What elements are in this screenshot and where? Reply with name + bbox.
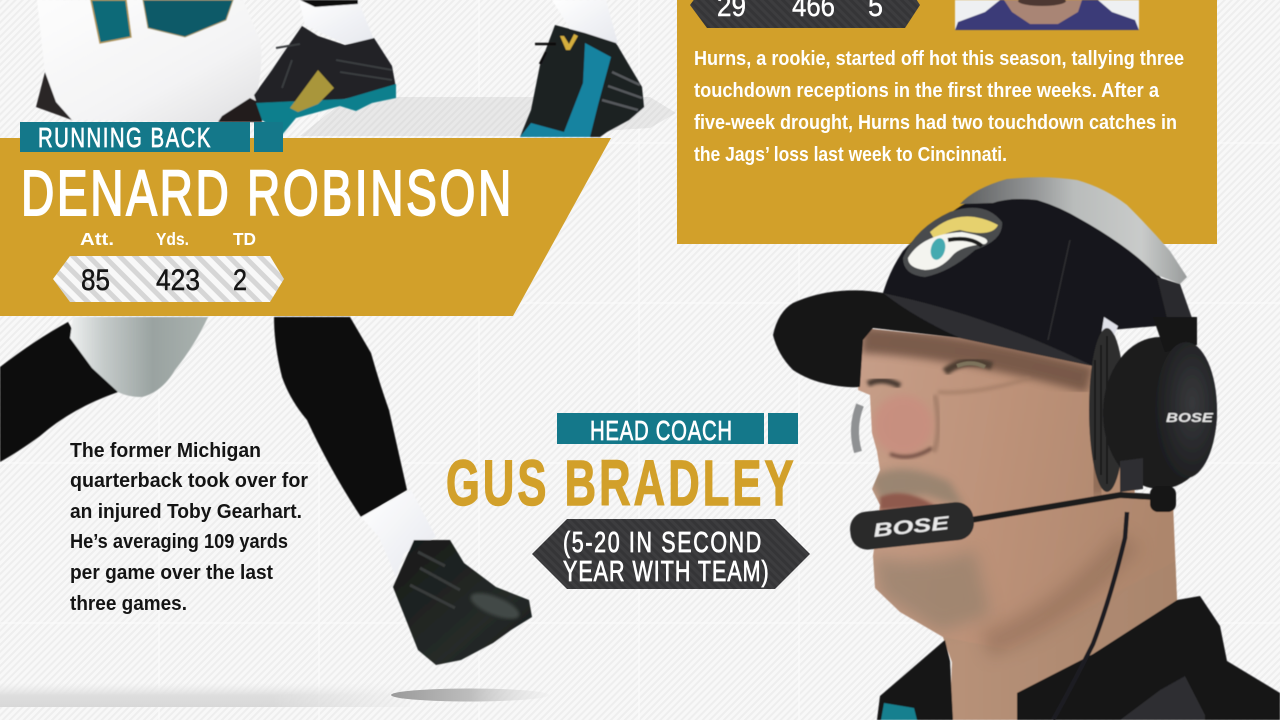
- record badge: (5-20 IN SECOND: [563, 527, 761, 559]
- right cleat and sock: [520, 0, 644, 137]
- headset cable: [1053, 512, 1127, 720]
- photo: Robinson lower body: [0, 317, 532, 665]
- eyes: [868, 380, 900, 386]
- cap: [773, 192, 1170, 387]
- player name: DENARD ROBINSON: [21, 158, 511, 229]
- body text: five-week drought, Hurns had two touchdown catches in: [694, 111, 1177, 134]
- shorts: [70, 317, 208, 397]
- collar and jacket: [877, 596, 1280, 720]
- stat labels: [80, 229, 256, 249]
- boom microphone: BOSE: [872, 513, 952, 542]
- headset ear cup: [1089, 317, 1217, 492]
- stat labels: Yds.: [156, 229, 189, 249]
- face and neck: [857, 328, 1178, 720]
- text block: Robinson description: The former Michigan: [70, 439, 261, 462]
- body text: [694, 47, 1184, 166]
- text block: Robinson description: quarterback took over for: [70, 469, 308, 492]
- panel: Hurns gold box: [677, 0, 1217, 244]
- text block: Robinson description: an injured Toby Gearhart.: [70, 500, 302, 523]
- text block: Robinson description: [70, 439, 308, 615]
- stat values pill: [690, 0, 920, 28]
- stat values: 85: [81, 264, 110, 297]
- stat values: 423: [156, 264, 200, 297]
- role tag: [557, 413, 798, 447]
- headshot: [955, 0, 1139, 30]
- headset strap: [1157, 277, 1192, 322]
- trailing leg: [0, 322, 118, 462]
- stat values: 2: [233, 264, 247, 297]
- role tag: HEAD COACH: [590, 416, 732, 447]
- jersey: [36, 0, 262, 122]
- record badge: [532, 519, 810, 589]
- panel: Robinson gold banner: [0, 122, 611, 316]
- left cleat and sock: [254, 0, 396, 135]
- boom microphone: [848, 486, 1176, 551]
- neck: [944, 566, 1178, 686]
- photo: coach Gus Bradley: [773, 177, 1280, 720]
- text block: Robinson description: three games.: [70, 592, 187, 615]
- position tag: RUNNING BACK: [38, 123, 210, 154]
- text block: Robinson description: per game over the last: [70, 561, 273, 584]
- stubble and mouth: [870, 469, 965, 508]
- headband: [960, 177, 1187, 284]
- panel: head coach title block: [446, 413, 810, 589]
- record badge: YEAR WITH TEAM): [563, 556, 769, 588]
- far earpiece: [855, 405, 860, 452]
- leading leg: [274, 317, 407, 517]
- stat labels: Att.: [80, 229, 114, 249]
- cap shadow on forehead: [862, 340, 1090, 380]
- sock: [361, 490, 436, 577]
- position tag: [20, 122, 283, 154]
- stat labels: TD: [233, 229, 256, 249]
- body text: the Jags’ loss last week to Cincinnati.: [694, 143, 1007, 166]
- coach name: GUS BRADLEY: [446, 447, 793, 519]
- body text: Hurns, a rookie, started off hot this season, tallying three: [694, 47, 1184, 70]
- shadow under top cleats: [300, 97, 676, 136]
- text block: Robinson description: He’s averaging 109 yards: [70, 530, 288, 553]
- stat values: [53, 256, 284, 302]
- ground shadow under Robinson: [0, 688, 538, 707]
- headset ear cup: BOSE: [1166, 410, 1213, 425]
- leading cleat: [393, 540, 532, 665]
- photo: Robinson upper body and cleats: [36, 0, 644, 137]
- body text: touchdown receptions in the first three weeks. After a: [694, 79, 1160, 102]
- icon: jaguar cap logo: [903, 208, 1002, 277]
- nose: [876, 398, 928, 451]
- jaw stubble: [872, 550, 990, 632]
